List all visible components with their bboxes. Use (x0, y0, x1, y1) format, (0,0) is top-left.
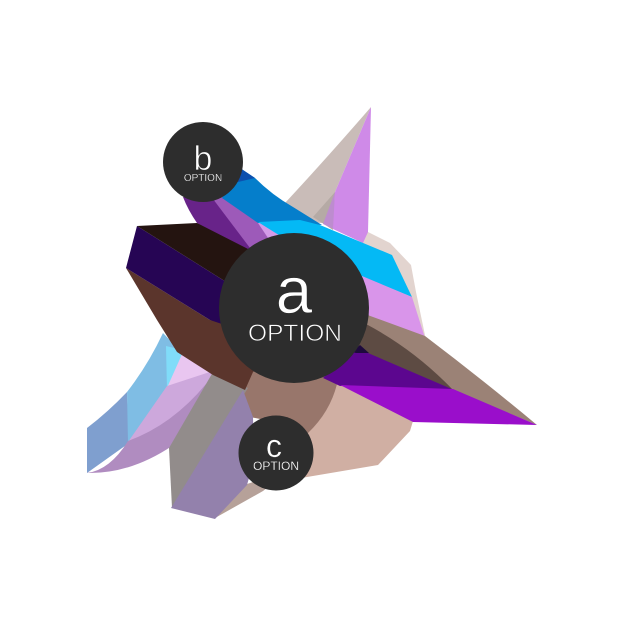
shape: peach facet (290, 380, 413, 480)
shape: mocha facet (243, 360, 337, 433)
circle: option a (219, 233, 369, 383)
shape: blue ribbon (222, 168, 322, 225)
shape: dark block (126, 223, 300, 390)
circle: option a: OPTION (248, 320, 342, 347)
shape: lilac ribbon (362, 276, 425, 338)
shape: lower left fin (87, 333, 222, 473)
shape: right dark taupe facet (350, 324, 453, 390)
shape: lower gray and purple-gray blades (169, 372, 254, 519)
shape: right dark purple facet (323, 350, 454, 390)
shape: right taupe point (362, 313, 537, 425)
shape: top spike (285, 107, 371, 243)
circle: option b (163, 122, 243, 202)
shape: pale beige back facet (350, 231, 426, 340)
shape: purple ribbon (183, 195, 288, 254)
circle: option c: OPTION (253, 459, 299, 473)
shape: cyan ribbon (258, 220, 412, 297)
shape: lower taupe facet (215, 470, 290, 518)
circle: option a: a (276, 253, 313, 327)
circle: option b: OPTION (184, 173, 222, 184)
circle: option c (238, 416, 314, 490)
circle: option b: b (194, 140, 212, 178)
shape: right bright purple point (340, 385, 537, 425)
circle: option c: c (266, 428, 282, 464)
